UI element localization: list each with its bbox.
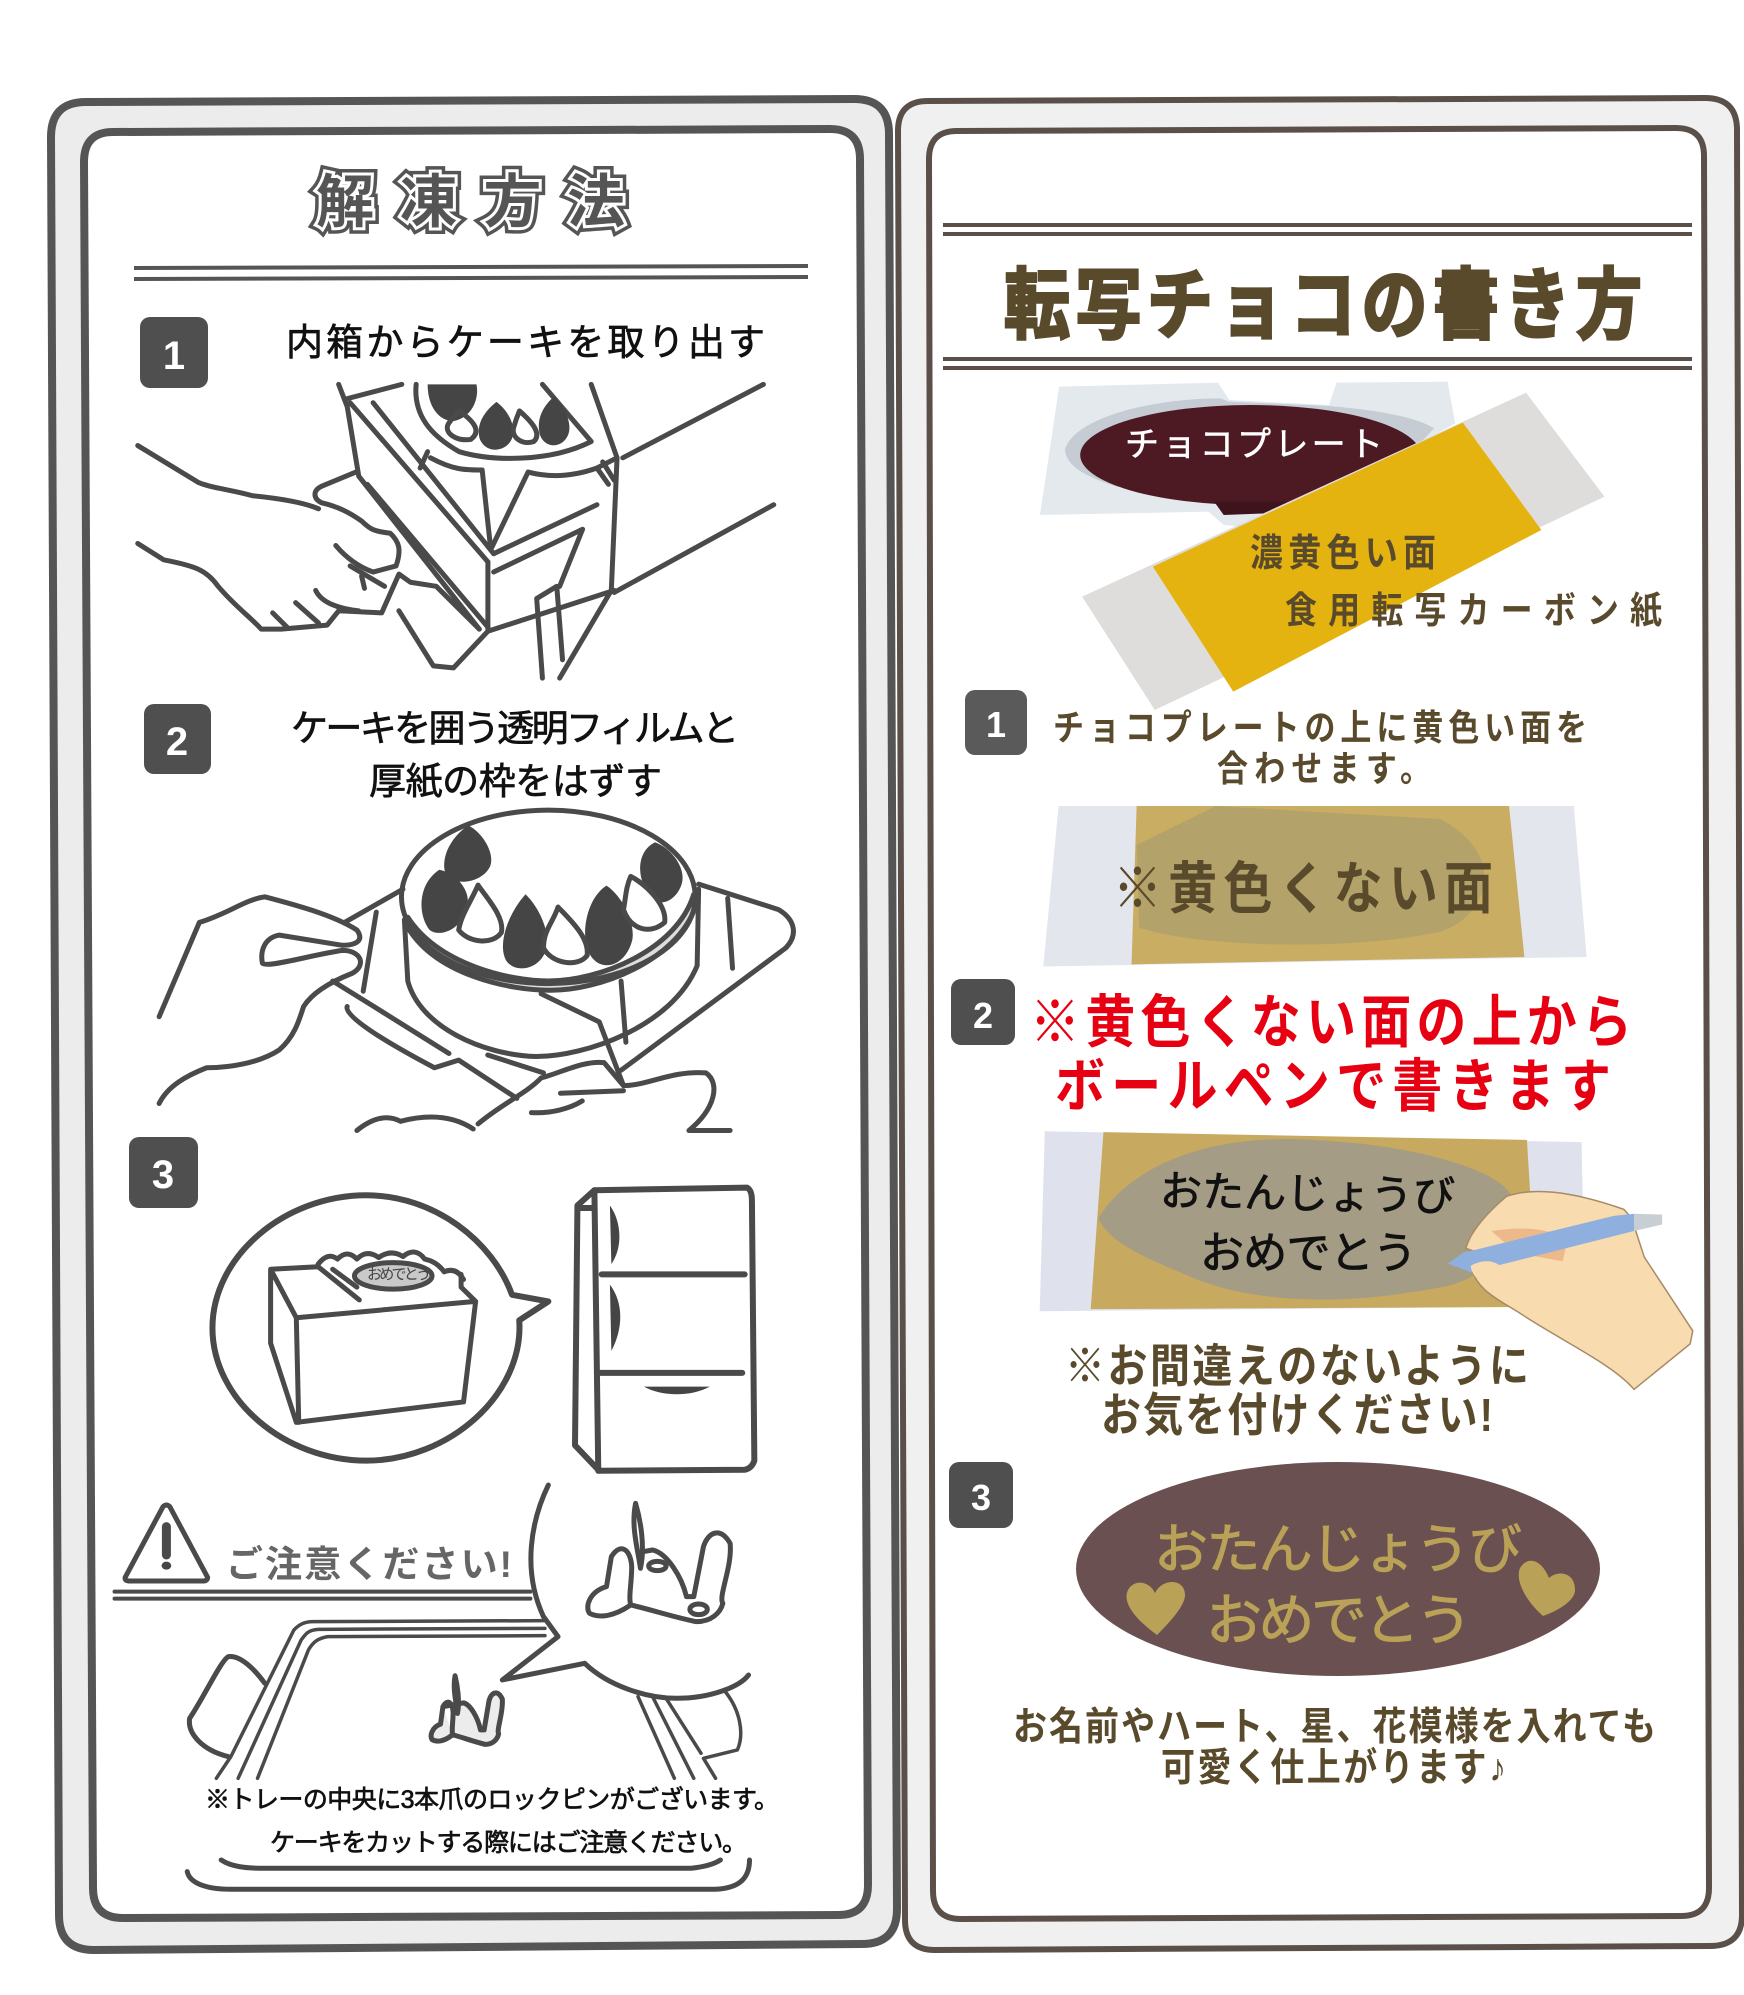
step 1 text: 内箱からケーキを取り出す	[286, 322, 765, 363]
cake label: おめでとう	[367, 1266, 431, 1283]
heading: 解凍方法: 解凍方法	[316, 170, 625, 235]
badge 1: 1	[163, 334, 185, 378]
plate label: チョコプレート	[1125, 426, 1383, 464]
badge R3: 3	[971, 1477, 991, 1518]
heart left	[1127, 1582, 1185, 1635]
red instruction: ※黄色くない面の上から	[1030, 991, 1632, 1055]
caution note: ケーキをカットする際にはご注意ください。	[270, 1829, 747, 1857]
outer frame right	[898, 98, 1742, 1950]
icon: large lock pin	[588, 1503, 730, 1622]
illustration: speech bubble with box	[212, 1195, 548, 1461]
finished chocolate plate	[1076, 1462, 1600, 1676]
panel: thawing method	[51, 99, 897, 1950]
closing text: お名前やハート、星、花模様を入れても	[1013, 1705, 1656, 1749]
heading: 転写チョコの書き方: 転写チョコの書き方	[1004, 263, 1642, 349]
badge 3: 3	[152, 1153, 174, 1197]
badge R1	[965, 690, 1027, 755]
step 2 text: ケーキを囲う透明フィルムと	[291, 708, 739, 749]
red instruction	[1030, 991, 1632, 1119]
inner frame right	[929, 128, 1709, 1919]
heading rule	[134, 266, 808, 279]
handwriting: おめでとう	[1200, 1229, 1417, 1278]
non-yellow side label: ※黄色くない面	[1113, 858, 1493, 921]
handwriting: おたんじょうび	[1160, 1168, 1455, 1220]
badge R1: 1	[986, 704, 1006, 745]
icon: small lock pin	[431, 1676, 502, 1744]
illustration: taking cake out of inner box	[138, 384, 774, 678]
badge R2: 2	[973, 995, 993, 1036]
caution note: ※トレーの中央に3本爪のロックピンがございます。	[205, 1785, 779, 1814]
photo: writing on paper	[1040, 1131, 1584, 1311]
plate writing: おめでとう	[1206, 1589, 1472, 1652]
icon: warning triangle	[125, 1505, 208, 1581]
badge R2	[951, 979, 1015, 1045]
tray	[1040, 382, 1455, 527]
carbon paper label: 食用転写カーボン紙	[1285, 591, 1662, 632]
careful note: ※お間違えのないように	[1065, 1341, 1529, 1393]
plate writing	[1154, 1520, 1522, 1652]
step R1 text: チョコプレートの上に黄色い面を	[1053, 709, 1587, 749]
top rules	[943, 225, 1692, 368]
yellow side label: 濃黄色い面	[1250, 532, 1436, 575]
red instruction: ボールペンで書きます	[1055, 1055, 1611, 1119]
step 2 text: 厚紙の枠をはずす	[369, 761, 662, 802]
step 2 text	[291, 708, 739, 802]
chocolate foot	[1214, 502, 1289, 515]
illustration: hand holding pen	[1448, 1192, 1693, 1389]
transfer paper	[1082, 393, 1604, 710]
handwriting	[1160, 1168, 1455, 1278]
badge 2: 2	[166, 720, 188, 764]
badge 3	[129, 1137, 198, 1208]
badge R3	[949, 1462, 1013, 1528]
photo: non-yellow side	[1043, 806, 1587, 966]
badge 2	[144, 704, 211, 774]
panel: how to write with transfer chocolate	[898, 98, 1742, 1950]
heart right	[1519, 1561, 1575, 1616]
yellow side of paper	[1153, 423, 1541, 692]
closing text	[1013, 1705, 1656, 1790]
step R1 text: 合わせます。	[1217, 750, 1431, 790]
heading: 解凍方法: 解凍方法	[316, 170, 625, 235]
careful note: お気を付けください!	[1101, 1390, 1493, 1442]
tray hollow	[1065, 398, 1434, 487]
outer frame left	[51, 99, 897, 1950]
chocolate plate	[1080, 405, 1421, 505]
illustration: refrigerator	[575, 1188, 754, 1471]
careful note	[1065, 1341, 1529, 1442]
caution note	[205, 1785, 779, 1857]
illustration: removing film and frame from cake	[159, 810, 793, 1131]
closing text: 可愛く仕上がります♪	[1161, 1746, 1506, 1790]
illustration: tray with lock pin	[115, 1485, 749, 1889]
badge 1	[140, 317, 208, 388]
plate writing: おたんじょうび	[1154, 1520, 1522, 1580]
photo: chocolate plate in tray with transfer paper	[1040, 382, 1604, 710]
caution heading: ご注意ください!	[226, 1544, 512, 1585]
inner frame left	[84, 129, 868, 1918]
step R1 text	[1053, 709, 1587, 790]
